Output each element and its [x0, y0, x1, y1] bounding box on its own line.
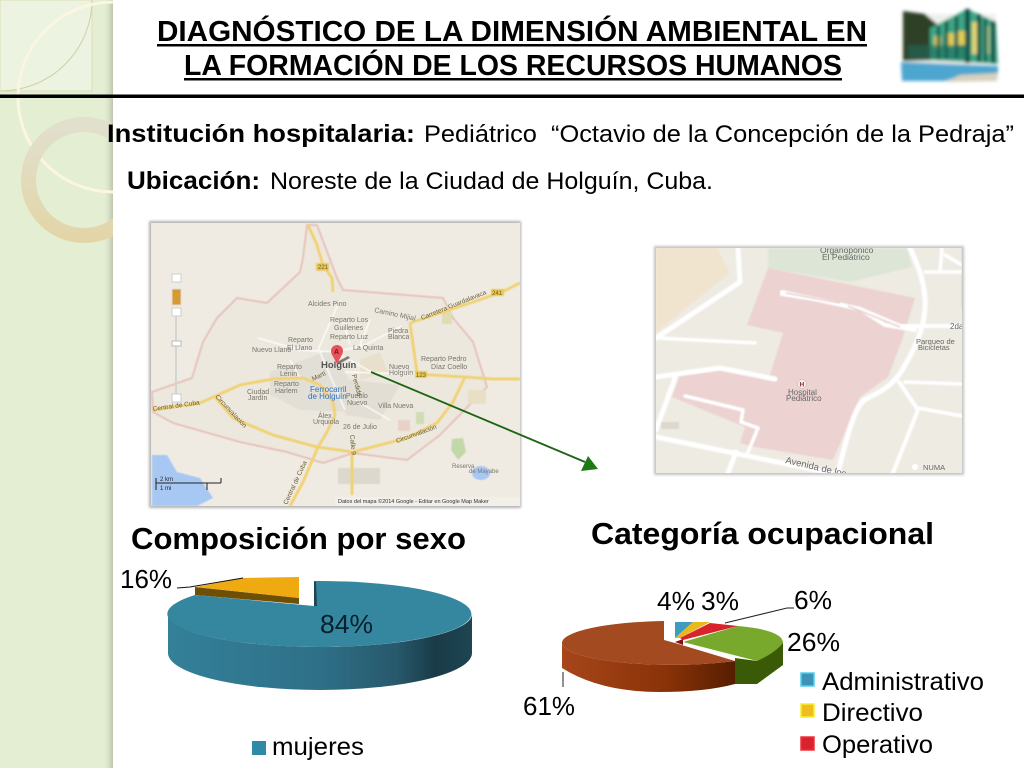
- map attribution: Datos del mapa ©2014 Google - Editar en Google Map Maker: [338, 498, 489, 505]
- map: Holguín city: 123: [416, 373, 427, 379]
- map scale bar: [156, 477, 221, 492]
- label: 6%: 6%: [794, 585, 832, 615]
- map: Holguín city: Reparto: [277, 364, 302, 371]
- map: Holguín city: Camino Mijial: [374, 307, 417, 323]
- map: hospital detail: Hospital: [788, 388, 817, 397]
- map: Holguín city: Villa Nueva: [378, 403, 413, 410]
- label: 4%: 4%: [657, 586, 695, 616]
- map: Holguín city: Lenin: [280, 371, 297, 378]
- slice: 61% brown side: [562, 643, 735, 692]
- map scale bar: 2 km: [160, 477, 173, 483]
- slice: 84% teal side: [168, 614, 472, 690]
- map: Holguín city: de Holguín: [308, 392, 347, 401]
- legend: categoría ocupacional: Operativo: [822, 731, 933, 759]
- icon: map pin: A: [334, 349, 339, 356]
- map: Holguín city: 241: [492, 291, 503, 297]
- map: Holguín city: La Quinta: [353, 345, 383, 352]
- map: Holguín city: Ferrocarril: [310, 385, 347, 394]
- label: 3%: 3%: [701, 586, 739, 616]
- map: Holguín city: Reparto Pedro: [421, 356, 467, 363]
- legend: categoría ocupacional: Directivo: [822, 699, 923, 727]
- slice: 26% green: [683, 626, 783, 684]
- horizontal rule: [0, 94, 1024, 98]
- map: Holguín city: Nuevo Llano: [252, 347, 291, 354]
- map: Holguín city: El Llano: [287, 345, 312, 352]
- map: Holguín city: Álex: [318, 411, 332, 420]
- map: Holguín city: 26 de Julio: [343, 424, 377, 431]
- map: Holguín city: Piedra: [388, 328, 408, 335]
- map: hospital detail: NUMA: [923, 463, 945, 472]
- map: Holguín city: de Mayabe: [469, 469, 499, 475]
- icon: map pin: [331, 345, 350, 364]
- map scale bar: 1 mi: [160, 486, 171, 492]
- icon: hospital marker: H: [800, 382, 804, 388]
- slice: 4% blue: [675, 622, 693, 638]
- label: 16%: 16%: [120, 564, 172, 594]
- legend: mujeres: mujeres: [272, 733, 364, 761]
- legend: categoría ocupacional: Administrativo: [822, 668, 984, 696]
- map: Holguín city: Reparto: [288, 337, 313, 344]
- title: [157, 14, 867, 82]
- heading: categoría ocupacional: Categoría ocupacional: [591, 516, 934, 551]
- map: Holguín city: Martí: [311, 370, 327, 383]
- holguín label: Holguín: [321, 360, 357, 371]
- map: Holguín city: Holguín: [389, 370, 413, 377]
- map: hospital detail: Avenida de los: [784, 455, 848, 480]
- map: Holguín city: Reparto Luz: [330, 334, 369, 341]
- map: Holguín city: Reserva: [452, 464, 475, 470]
- map: Holguín city: Circunvalación: [214, 394, 248, 430]
- map: Holguín city: Alcides Pino: [308, 301, 347, 308]
- map: Holguín city: Nuevo: [389, 364, 409, 371]
- arrow: from city map to hospital detail: [371, 372, 598, 471]
- pie chart: categoría ocupacional: [523, 585, 840, 721]
- map: Holguín city: [149, 221, 521, 508]
- location text: Noreste de la Ciudad de Holguín, Cuba.: [270, 168, 713, 195]
- label: 26%: 26%: [787, 627, 840, 657]
- leader line: [177, 578, 243, 588]
- slice: 61% brown top: [562, 621, 735, 665]
- map: Holguín city: Jardín: [248, 395, 268, 402]
- map: hospital detail: El Pediátrico: [822, 252, 870, 262]
- map: Holguín city: Nuevo: [347, 400, 367, 407]
- map: hospital detail: Organopónico: [820, 245, 874, 255]
- map: Holguín city: Harlem: [275, 388, 298, 395]
- map: Holguín city: Pueblo: [346, 393, 368, 400]
- location label: Ubicación:: [127, 167, 260, 195]
- map: Holguín city: Carretera Guardalavaca: [420, 289, 488, 322]
- map: hospital detail: Pediátrico: [786, 394, 822, 403]
- map: Holguín city: Central de Cuba: [282, 460, 309, 506]
- slice: 6% red: [680, 623, 738, 640]
- map: hospital detail: 2da: [950, 322, 964, 331]
- icon: hospital building photo: [901, 9, 998, 82]
- map: hospital detail: [654, 245, 964, 480]
- map: Holguín city: 221: [318, 265, 329, 271]
- map: Holguín city: Reparto Los: [330, 317, 369, 324]
- pie chart: composición por sexo: [120, 564, 472, 690]
- map: hospital detail: Parqueo de: [916, 337, 955, 346]
- map: Holguín city: Circunvalación: [395, 424, 438, 445]
- map: Holguín city: Urquiola: [313, 419, 339, 426]
- map zoom control: [172, 274, 181, 402]
- legend: categoría ocupacional: [801, 668, 984, 759]
- label: 84%: 84%: [320, 609, 373, 639]
- slice: 3% yellow: [675, 622, 710, 638]
- title: DIAGNÓSTICO DE LA DIMENSIÓN AMBIENTAL EN: [157, 14, 867, 48]
- map: Holguín city: Calle 9: [348, 435, 357, 456]
- sidebar background: [0, 0, 113, 768]
- slice: 84% teal top: [167, 581, 471, 647]
- map: Holguín city: Central de Cuba: [152, 399, 201, 413]
- map: Holguín city: Guillenes: [334, 325, 364, 332]
- map: Holguín city: Blanca: [388, 334, 410, 341]
- map: Holguín city: Perdida: [350, 374, 363, 398]
- map: Holguín city: Díaz Coello: [431, 364, 467, 371]
- map: Holguín city: Ciudad: [247, 389, 269, 396]
- heading: composición por sexo: Composición por sexo: [131, 521, 466, 556]
- institution name: Pediátrico “Octavio de la Concepción de la Pedraja”: [424, 121, 1014, 148]
- icon: hospital marker: [798, 380, 806, 388]
- institution text: Institución hospitalaria:: [107, 120, 415, 148]
- map: Holguín city: Reparto: [274, 381, 299, 388]
- map: hospital detail: Bicicletas: [918, 343, 950, 352]
- leader lines: [563, 608, 794, 687]
- slice: 16% gold: [195, 577, 299, 604]
- title: LA FORMACIÓN DE LOS RECURSOS HUMANOS: [184, 48, 842, 82]
- label: 61%: 61%: [523, 691, 575, 721]
